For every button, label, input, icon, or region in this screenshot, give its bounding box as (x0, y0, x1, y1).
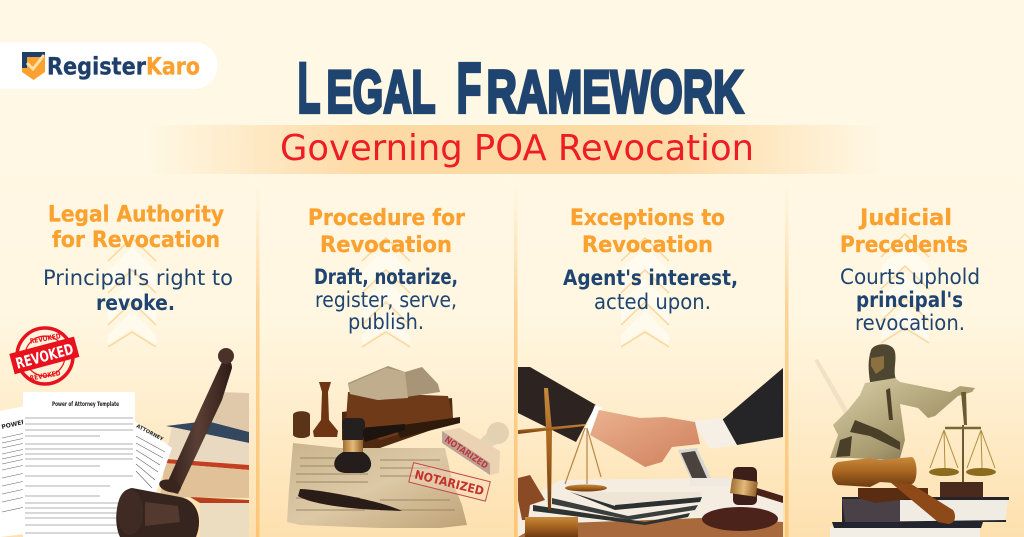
body text: register, serve, (315, 288, 457, 312)
body text (840, 265, 980, 335)
title: L (298, 49, 320, 128)
heading: Exceptions to (570, 206, 725, 231)
column dividers (256, 185, 788, 537)
candle holder (313, 382, 338, 437)
scale (929, 392, 996, 499)
hands (590, 410, 700, 467)
body text: Agent's interest, (563, 266, 738, 290)
body text (314, 265, 458, 334)
body text: Draft, notarize, (314, 265, 458, 289)
heading (308, 206, 465, 258)
panel: legal authority text (43, 202, 233, 315)
panel: procedure chevrons (362, 238, 410, 347)
main document: Power of Attorney Template (52, 400, 119, 408)
right document (120, 420, 172, 510)
heading: Precedents (840, 233, 968, 258)
logo wordmark: Register (47, 52, 146, 80)
panel: legal authority chevrons (108, 238, 156, 347)
title: F (456, 49, 482, 128)
illustration: books, gavel and notarized stamp (287, 366, 509, 528)
gavel (116, 348, 234, 537)
heading: Judicial (858, 206, 952, 231)
panel: exceptions text (563, 206, 738, 314)
folders (533, 492, 702, 525)
heading (570, 206, 725, 258)
rubber stamp: NOTARIZED (442, 435, 489, 471)
panel: judicial text (840, 206, 980, 335)
heading: Legal Authority (48, 202, 224, 228)
body text: Principal's right to (43, 266, 233, 290)
top book (842, 497, 1009, 522)
pen (298, 489, 402, 511)
main document (23, 392, 135, 537)
small figurine (518, 475, 545, 520)
logo pill (0, 42, 217, 89)
body text: revocation. (855, 311, 965, 335)
left document (0, 405, 60, 537)
subtitle band (150, 125, 880, 174)
left document: POWER OF (1, 416, 38, 431)
right cuff (692, 418, 737, 449)
left arm (518, 367, 596, 442)
body text: revoke. (96, 291, 175, 315)
heading: Procedure for (308, 206, 465, 231)
heading (840, 206, 968, 258)
body text: publish. (348, 310, 424, 334)
book stack (342, 366, 460, 448)
desk (518, 478, 783, 537)
statue drapery folds (836, 388, 900, 457)
illustration: lady justice with scales, gavel and books (814, 344, 1009, 537)
right document: ATTORNEY (135, 423, 164, 443)
icon: shield check (22, 52, 45, 80)
heading: for Revocation (52, 228, 220, 253)
stamp: revoked: REVOKED (14, 340, 75, 373)
body text: acted upon. (594, 290, 711, 314)
title: EGAL (326, 58, 436, 125)
heading (48, 202, 224, 253)
illustration: handshake over law desk (518, 367, 783, 537)
rubber stamp (442, 422, 509, 475)
heading: Revocation (582, 233, 713, 258)
right arm (722, 368, 783, 445)
parchment writing (296, 458, 455, 510)
title: RAMEWORK (486, 58, 744, 125)
gavel (334, 418, 405, 473)
gavel (832, 457, 955, 524)
stamp: revoked (9, 328, 79, 384)
parchment (287, 443, 467, 528)
body text (563, 266, 738, 314)
sword (814, 359, 849, 415)
statue head (869, 344, 897, 382)
brass scale (518, 388, 607, 537)
bottom book (830, 522, 983, 537)
notarized stamp impression: NOTARIZED (413, 467, 485, 498)
gavel (702, 467, 783, 531)
stamp: revoked: REVOKED (29, 369, 61, 383)
left cuff (584, 405, 602, 436)
body text: principal's (856, 288, 963, 312)
title (298, 49, 744, 128)
heading: Revocation (320, 233, 452, 258)
panel: procedure text (308, 206, 465, 334)
ink pot (293, 411, 310, 438)
panel: exceptions chevrons (621, 238, 669, 347)
panel: judicial chevrons (881, 234, 929, 343)
subtitle: Governing POA Revocation (280, 128, 754, 169)
illustration: documents, stamp, gavel and books (0, 328, 249, 537)
logo wordmark: Karo (146, 52, 200, 80)
body text (43, 266, 233, 315)
statue face (871, 356, 884, 374)
body text: Courts uphold (840, 265, 980, 289)
books stack (160, 392, 249, 537)
statue body (830, 378, 975, 460)
laptop (678, 448, 712, 482)
stamp: revoked: REVOKED (29, 332, 61, 346)
